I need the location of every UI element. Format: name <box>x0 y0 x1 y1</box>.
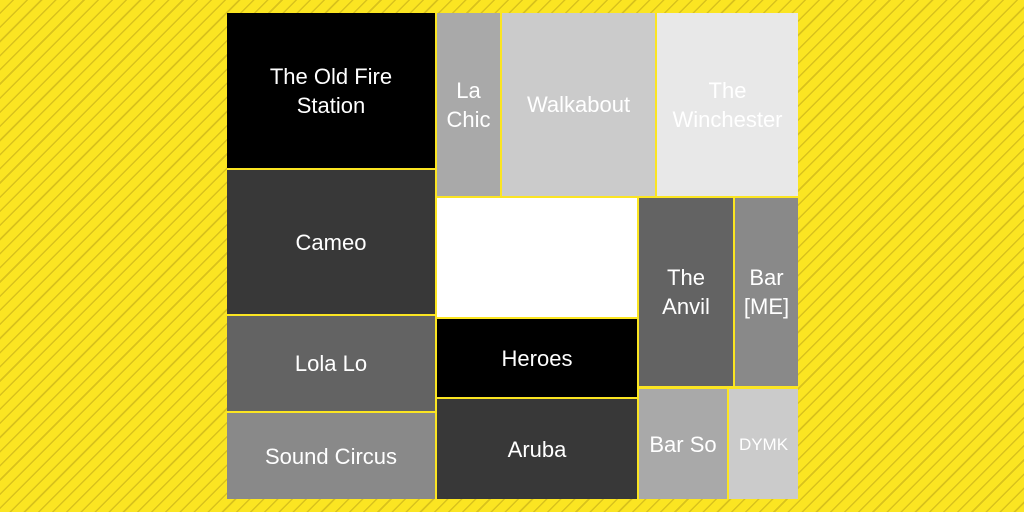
cell: Sound Circus: Sound Circus <box>265 444 397 468</box>
cell: The Winchester: The <box>709 78 746 102</box>
cell: Walkabout <box>502 13 655 196</box>
cell: Lola Lo: Lola Lo <box>295 351 367 376</box>
cell: Sound Circus <box>227 413 435 499</box>
cell: Aruba: Aruba <box>508 436 566 462</box>
cell: The Anvil: Anvil <box>662 294 710 319</box>
cell: The Anvil <box>639 198 733 386</box>
cell: The Winchester <box>657 13 798 196</box>
cell: La Chic: La <box>456 78 481 102</box>
cell: The Old Fire Station <box>227 13 435 168</box>
cell: La Chic: Chic <box>446 106 490 132</box>
cell: Bar [ME]: Bar <box>749 265 784 290</box>
cell: The Anvil: The <box>667 265 705 290</box>
cell: Bar [ME] <box>735 198 798 386</box>
treemap <box>227 13 798 499</box>
cell: DYMK: DYMK <box>739 434 788 454</box>
cell: Aruba <box>437 399 637 499</box>
cell: Bar [ME]: [ME] <box>744 294 789 319</box>
cell: Lola Lo <box>227 316 435 411</box>
cell: Walkabout: Walkabout <box>527 92 630 117</box>
cell: La Chic <box>437 13 500 196</box>
cell: DYMK <box>729 389 798 499</box>
cell: Cameo: Cameo <box>296 230 366 254</box>
cell: Bar So: Bar So <box>649 432 717 456</box>
cell: The Old Fire Station: Station <box>297 92 365 118</box>
cell: Bar So <box>639 389 727 499</box>
cell: blank white <box>437 198 637 317</box>
cell: Heroes: Heroes <box>502 346 572 370</box>
cell: The Old Fire Station: The Old Fire <box>270 64 392 88</box>
cell: The Winchester: Winchester <box>672 106 783 132</box>
cell: Heroes <box>437 319 637 397</box>
cell: Cameo <box>227 170 435 314</box>
